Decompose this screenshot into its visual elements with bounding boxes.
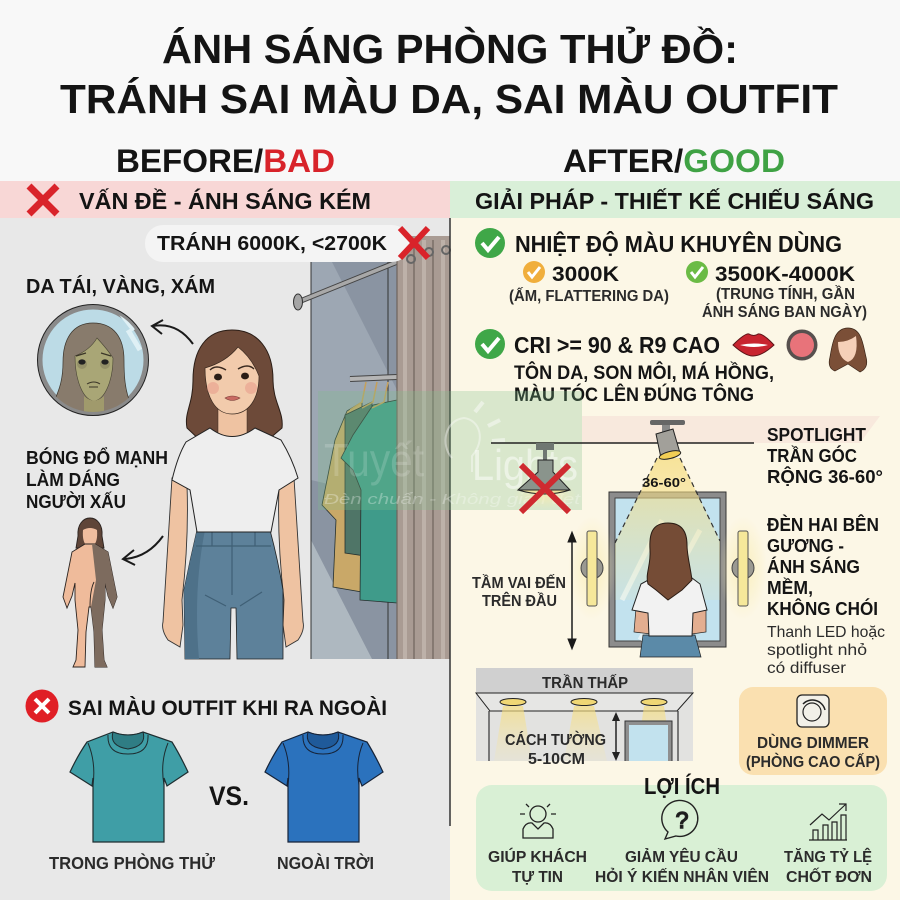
text: vs: VS. <box>209 781 249 811</box>
text: shoulder to head: TRÊN ĐẦU <box>482 591 557 610</box>
section: CRI: MÀU TÓC LÊN ĐÚNG TÔNG <box>514 382 754 406</box>
text: spotlight: RỘNG 36-60° <box>767 466 883 487</box>
heading: after good: AFTER/GOOD <box>563 143 785 179</box>
icon: teal tee <box>70 732 188 842</box>
text: spotlight: SPOTLIGHT <box>767 425 866 445</box>
panel: fitting room <box>294 236 450 659</box>
benefit: conversion: TĂNG TỶ LỆ <box>784 847 872 866</box>
spotlight fixture <box>650 420 685 461</box>
text: side lamps <box>767 514 885 677</box>
watermark <box>318 391 880 510</box>
section: colour temperature: NHIỆT ĐỘ MÀU KHUYÊN DÙNG <box>515 230 842 257</box>
icon: growth chart <box>809 804 847 840</box>
watermark: Đèn chuẩn - Không gian đẹt <box>324 491 581 508</box>
text: harsh shadows <box>26 447 168 512</box>
text: side lamps: GƯƠNG - <box>767 536 844 556</box>
panel: low ceiling: CÁCH TƯỜNG <box>505 730 606 749</box>
arrow: to mirror <box>152 320 193 344</box>
woman figure <box>163 330 303 659</box>
arrow: to small figure <box>123 536 163 565</box>
heading: benefits: LỢI ÍCH <box>644 772 720 799</box>
band: problem: VẤN ĐỀ - ÁNH SÁNG KÉM <box>79 187 371 214</box>
heading: wrong outfit colour: SAI MÀU OUTFIT KHI RA NGOÀI <box>68 697 387 720</box>
label: outdoors: NGOÀI TRỜI <box>277 852 374 873</box>
section: colour temperature: ÁNH SÁNG BAN NGÀY) <box>702 304 867 321</box>
watermark: Lights <box>472 441 578 490</box>
benefit: conversion <box>784 847 872 886</box>
clothes on rack <box>322 400 397 603</box>
text: harsh shadows: LÀM DÁNG <box>26 469 120 490</box>
icon: blue tee <box>265 732 383 842</box>
spotlight cone: 36-60° <box>642 476 686 490</box>
text: harsh shadows: BÓNG ĐỔ MẠNH <box>26 447 168 468</box>
icon: mirror with dull face <box>38 304 148 420</box>
curtain <box>397 236 450 659</box>
hanging lamp crossed out <box>513 443 577 512</box>
text: harsh shadows: NGƯỜI XẤU <box>26 491 126 512</box>
panel: low ceiling: TRẦN THẤP <box>542 673 628 692</box>
background left <box>0 218 450 900</box>
spotlight cone <box>615 458 720 600</box>
small body figure <box>63 518 117 667</box>
section: colour temperature: 3000K <box>552 263 619 286</box>
text: side lamps: ÁNH SÁNG <box>767 556 860 577</box>
text: shoulder to head <box>472 573 566 610</box>
text: side lamps: Thanh LED hoặc <box>767 624 885 641</box>
text: skin colour: DA TÁI, VÀNG, XÁM <box>26 275 215 298</box>
icon: confident customer <box>520 804 556 838</box>
band: solution <box>450 181 900 218</box>
callout: avoid kelvin <box>145 225 428 262</box>
benefit: confident: GIÚP KHÁCH <box>488 847 587 866</box>
panel: dimmer: (PHÒNG CAO CẤP) <box>746 752 880 771</box>
panel: dimmer: DÙNG DIMMER <box>757 733 869 752</box>
side lamps <box>568 516 767 620</box>
section: colour temperature <box>475 228 867 321</box>
heading: wrong outfit colour <box>26 690 387 722</box>
title <box>60 26 838 122</box>
text: side lamps: spotlight nhỏ <box>767 642 867 659</box>
icon: hair <box>829 328 867 372</box>
benefit: confident <box>488 847 587 886</box>
section: colour temperature: 3500K-4000K <box>715 263 855 286</box>
watermark: Tuyết <box>324 434 424 486</box>
section: colour temperature: (TRUNG TÍNH, GẦN <box>716 286 855 303</box>
benefit: fewer questions: GIẢM YÊU CẦU <box>625 847 738 866</box>
panel: benefits <box>476 772 887 891</box>
title: TRÁNH SAI MÀU DA, SAI MÀU OUTFIT <box>60 76 838 122</box>
benefit: confident: TỰ TIN <box>512 869 563 886</box>
text: side lamps: có diffuser <box>767 660 847 677</box>
icon: blush <box>786 330 818 360</box>
icon: question bubble: ? <box>676 807 688 833</box>
text: side lamps: KHÔNG CHÓI <box>767 598 878 619</box>
text: spotlight: TRẦN GÓC <box>767 445 857 466</box>
text: spotlight <box>767 425 883 487</box>
heading: before bad: BEFORE/BAD <box>116 143 335 179</box>
label: in fitting room: TRONG PHÒNG THỬ <box>49 852 215 873</box>
section: CRI <box>475 328 867 406</box>
text: side lamps: MỀM, <box>767 577 813 598</box>
background right <box>450 218 900 900</box>
woman back view <box>632 523 707 657</box>
icon: question bubble <box>662 800 698 839</box>
panel: low ceiling: 5-10CM <box>528 751 585 768</box>
arrow: height <box>568 532 576 649</box>
text: shoulder to head: TẦM VAI ĐẾN <box>472 573 566 592</box>
benefit: fewer questions: HỎI Ý KIẾN NHÂN VIÊN <box>595 867 769 886</box>
benefit: conversion: CHỐT ĐƠN <box>786 866 872 886</box>
section: CRI: TÔN DA, SON MÔI, MÁ HỒNG, <box>514 360 774 384</box>
mirror <box>609 492 726 647</box>
title: ÁNH SÁNG PHÒNG THỬ ĐỒ: <box>162 26 738 72</box>
band: problem <box>0 181 450 218</box>
benefit: fewer questions <box>595 847 769 886</box>
section: colour temperature: (ẤM, FLATTERING DA) <box>509 288 669 305</box>
icon: lips <box>733 334 774 356</box>
band: solution: GIẢI PHÁP - THIẾT KẾ CHIẾU SÁNG <box>475 186 874 214</box>
section: CRI: CRI >= 90 & R9 CAO <box>514 332 720 358</box>
panel: low ceiling <box>476 668 693 768</box>
text: side lamps: ĐÈN HAI BÊN <box>767 514 879 535</box>
panel: dimmer <box>739 687 887 775</box>
callout: avoid kelvin: TRÁNH 6000K, <2700K <box>157 232 388 255</box>
